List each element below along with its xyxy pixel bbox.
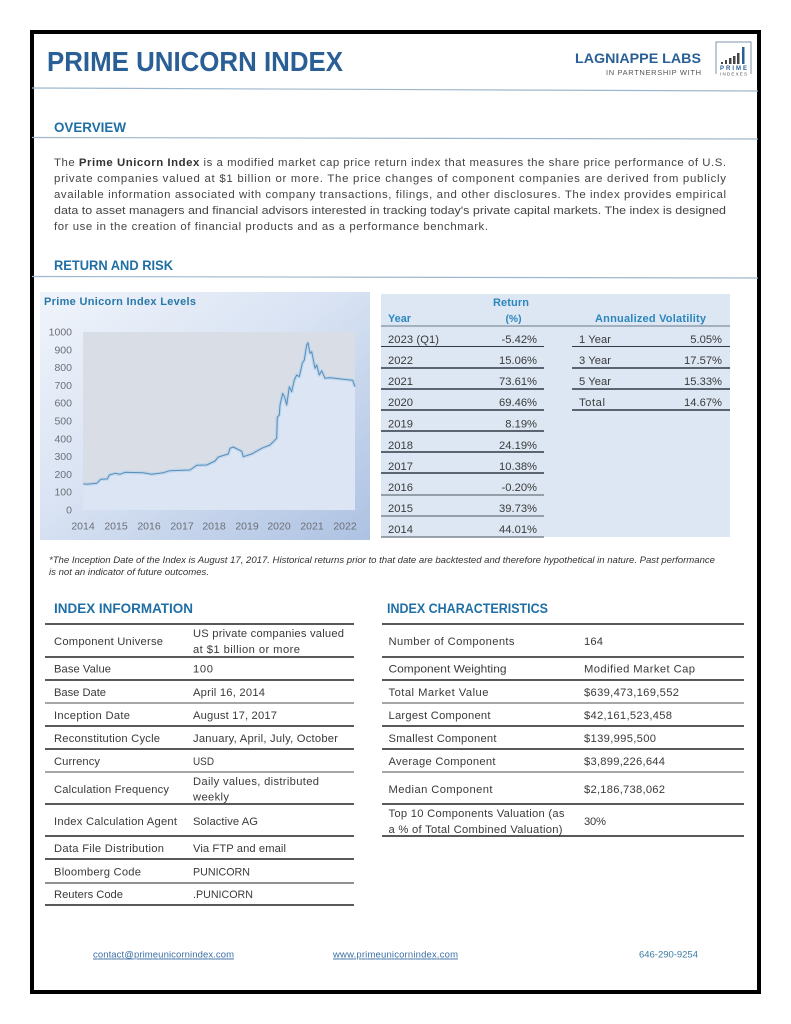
y axis labels: 100 — [54, 487, 72, 499]
volatility table rows: 5 Year — [579, 376, 611, 388]
x axis labels: 2014 — [71, 520, 95, 532]
y axis labels — [49, 326, 72, 516]
title: PRIME UNICORN INDEX — [47, 46, 344, 77]
table: index information: at $1 billion or more — [193, 644, 300, 656]
heading: return and risk: RETURN AND RISK — [54, 258, 173, 273]
table: index information: Index Calculation Agent — [54, 816, 178, 828]
table: index information: Bloomberg Code — [54, 866, 141, 878]
table: index information: 100 — [193, 664, 213, 676]
table header: Return — [493, 297, 529, 309]
returns table rows: 44.01% — [499, 524, 537, 536]
footer contacts — [93, 950, 698, 960]
returns table rows: -0.20% — [502, 482, 537, 494]
volatility table rows: 17.57% — [684, 355, 722, 367]
y axis labels: 300 — [54, 451, 72, 463]
y axis labels: 500 — [54, 416, 72, 428]
footer contacts: contact@primeunicornindex.com — [93, 950, 234, 960]
volatility table rows: 3 Year — [579, 355, 611, 367]
y axis labels: 400 — [54, 433, 72, 445]
panel: index levels chart — [40, 292, 370, 540]
table: index information: Reuters Code — [54, 889, 123, 901]
returns table rows: 2018 — [388, 440, 413, 452]
table: index characteristics: Average Component — [388, 756, 496, 768]
x axis labels — [71, 520, 357, 532]
footnote: *The Inception Date of the Index is August 17, 2017. Historical returns prior to that date are backtested and therefore hypothetical in nature. Past performance — [49, 555, 715, 566]
returns table rows: 2016 — [388, 482, 413, 494]
overview text — [54, 157, 726, 233]
footnote — [49, 555, 715, 578]
volatility table rows — [579, 334, 722, 409]
x axis labels: 2020 — [267, 520, 291, 532]
table: index characteristics: Top 10 Components Valuation (as — [388, 808, 565, 820]
returns table rows: 73.61% — [499, 376, 537, 388]
table: index information: Base Value — [54, 664, 111, 676]
returns table rows: 2023 (Q1) — [388, 334, 439, 346]
returns table rows: 2015 — [388, 503, 413, 515]
x axis labels: 2017 — [170, 520, 194, 532]
table: index characteristics: $139,995,500 — [584, 733, 656, 745]
returns table rows: 2022 — [388, 355, 413, 367]
returns table rows: 8.19% — [505, 418, 537, 430]
table: index characteristics: Total Market Value — [388, 687, 488, 699]
chart title: Prime Unicorn Index Levels — [44, 296, 196, 308]
table: index information: Solactive AG — [193, 816, 258, 828]
table: index characteristics: Smallest Component — [388, 733, 497, 745]
returns table rows: 69.46% — [499, 397, 537, 409]
table: index characteristics: Component Weighting — [388, 664, 506, 676]
panel: returns and volatility tables — [381, 294, 730, 537]
table header: Annualized Volatility — [595, 313, 707, 325]
returns table rows: 2021 — [388, 376, 413, 388]
table: index characteristics: 164 — [584, 636, 603, 648]
returns table rows: 2014 — [388, 524, 413, 536]
icon: prime indexes logo: INDEXES — [720, 72, 747, 76]
icon: prime indexes logo — [716, 42, 751, 76]
heading: overview: OVERVIEW — [54, 120, 126, 135]
x axis labels: 2016 — [137, 520, 161, 532]
table: index characteristics: Largest Component — [388, 710, 491, 722]
table: index information: Base Date — [54, 687, 106, 699]
y axis labels: 1000 — [49, 326, 72, 338]
table: index characteristics: a % of Total Combined Valuation) — [388, 824, 563, 836]
table: index information: Data File Distribution — [54, 843, 164, 855]
y axis labels: 900 — [54, 344, 72, 356]
volatility table rows: 1 Year — [579, 334, 611, 346]
icon: prime indexes logo: PRIME — [720, 66, 747, 72]
x axis labels: 2022 — [333, 520, 357, 532]
table: index characteristics: 30% — [584, 816, 606, 828]
returns table rows: -5.42% — [502, 334, 537, 346]
overview text: data to asset managers and financial advisors interested in tracking today's private capital markets. The index is designed — [54, 205, 726, 217]
table: index information: PUNICORN — [193, 866, 250, 878]
footnote: is not an indicator of future outcomes. — [49, 567, 209, 578]
table header: Year — [388, 313, 412, 325]
y axis labels: 0 — [66, 504, 72, 516]
overview text: available information associated with company transactions, filings, and other disclosures. The index provides empirical — [54, 189, 726, 201]
table: index information: Component Universe — [54, 636, 163, 648]
y axis labels: 200 — [54, 469, 72, 481]
footer contacts: www.primeunicornindex.com — [332, 950, 458, 960]
table: index characteristics: Modified Market Cap — [584, 664, 695, 676]
returns table rows: 2017 — [388, 461, 413, 473]
y axis labels: 800 — [54, 362, 72, 374]
table: index information: Currency — [54, 756, 100, 768]
table: index characteristics: Number of Components — [388, 636, 515, 648]
table: index information: US private companies valued — [193, 628, 344, 640]
y axis labels: 600 — [54, 398, 72, 410]
partner text — [575, 50, 701, 77]
volatility table rows: 14.67% — [684, 397, 722, 409]
heading: index information: INDEX INFORMATION — [54, 601, 193, 616]
table: index information: Inception Date — [54, 710, 130, 722]
volatility table rows: Total — [579, 397, 605, 409]
table: index information: Calculation Frequency — [54, 784, 169, 796]
overview text: The Prime Unicorn Index is a modified market cap price return index that measures the share price performance of U.S. — [54, 157, 726, 169]
overview text: for use in the creation of financial products and as a performance benchmark. — [54, 221, 488, 233]
returns table rows: 2019 — [388, 418, 413, 430]
x axis labels: 2021 — [300, 520, 324, 532]
partner text: IN PARTNERSHIP WITH — [606, 68, 701, 77]
y axis labels: 700 — [54, 380, 72, 392]
table header: (%) — [506, 314, 522, 325]
returns table rows — [388, 334, 537, 536]
table: index characteristics — [382, 624, 744, 836]
x axis labels: 2018 — [202, 520, 226, 532]
returns table rows: 39.73% — [499, 503, 537, 515]
index line — [83, 343, 355, 484]
x axis labels: 2015 — [104, 520, 128, 532]
table: index characteristics: $3,899,226,644 — [584, 756, 665, 768]
table: index information: Reconstitution Cycle — [54, 733, 160, 745]
table: index characteristics: $42,161,523,458 — [584, 710, 672, 722]
partner text: LAGNIAPPE LABS — [575, 50, 701, 66]
heading: index characteristics: INDEX CHARACTERISTICS — [387, 601, 548, 616]
table: index information: January, April, July, October — [193, 733, 338, 745]
returns table rows: 2020 — [388, 397, 413, 409]
table header — [388, 297, 707, 325]
x axis labels: 2019 — [235, 520, 259, 532]
overview text: private companies valued at $1 billion or more. The price changes of component companies are derived from publicly — [54, 173, 726, 185]
table: index information: .PUNICORN — [193, 889, 253, 901]
table: index information — [45, 624, 354, 905]
table: index information: August 17, 2017 — [193, 710, 277, 722]
table: index characteristics: Median Component — [388, 784, 493, 796]
table: index information: Daily values, distributed — [193, 776, 319, 788]
volatility table rows: 15.33% — [684, 376, 722, 388]
returns table rows: 24.19% — [499, 440, 537, 452]
table: index characteristics: $2,186,738,062 — [584, 784, 665, 796]
footer contacts: 646-290-9254 — [639, 950, 698, 960]
returns table rows: 15.06% — [499, 355, 537, 367]
table: index characteristics: $639,473,169,552 — [584, 687, 679, 699]
returns table rows: 10.38% — [499, 461, 537, 473]
plot area — [83, 332, 355, 510]
table: index information: April 16, 2014 — [193, 687, 265, 699]
table: index information: Via FTP and email — [193, 843, 286, 855]
table: index information: USD — [193, 756, 214, 768]
table: index information: weekly — [192, 792, 229, 804]
volatility table rows: 5.05% — [690, 334, 722, 346]
